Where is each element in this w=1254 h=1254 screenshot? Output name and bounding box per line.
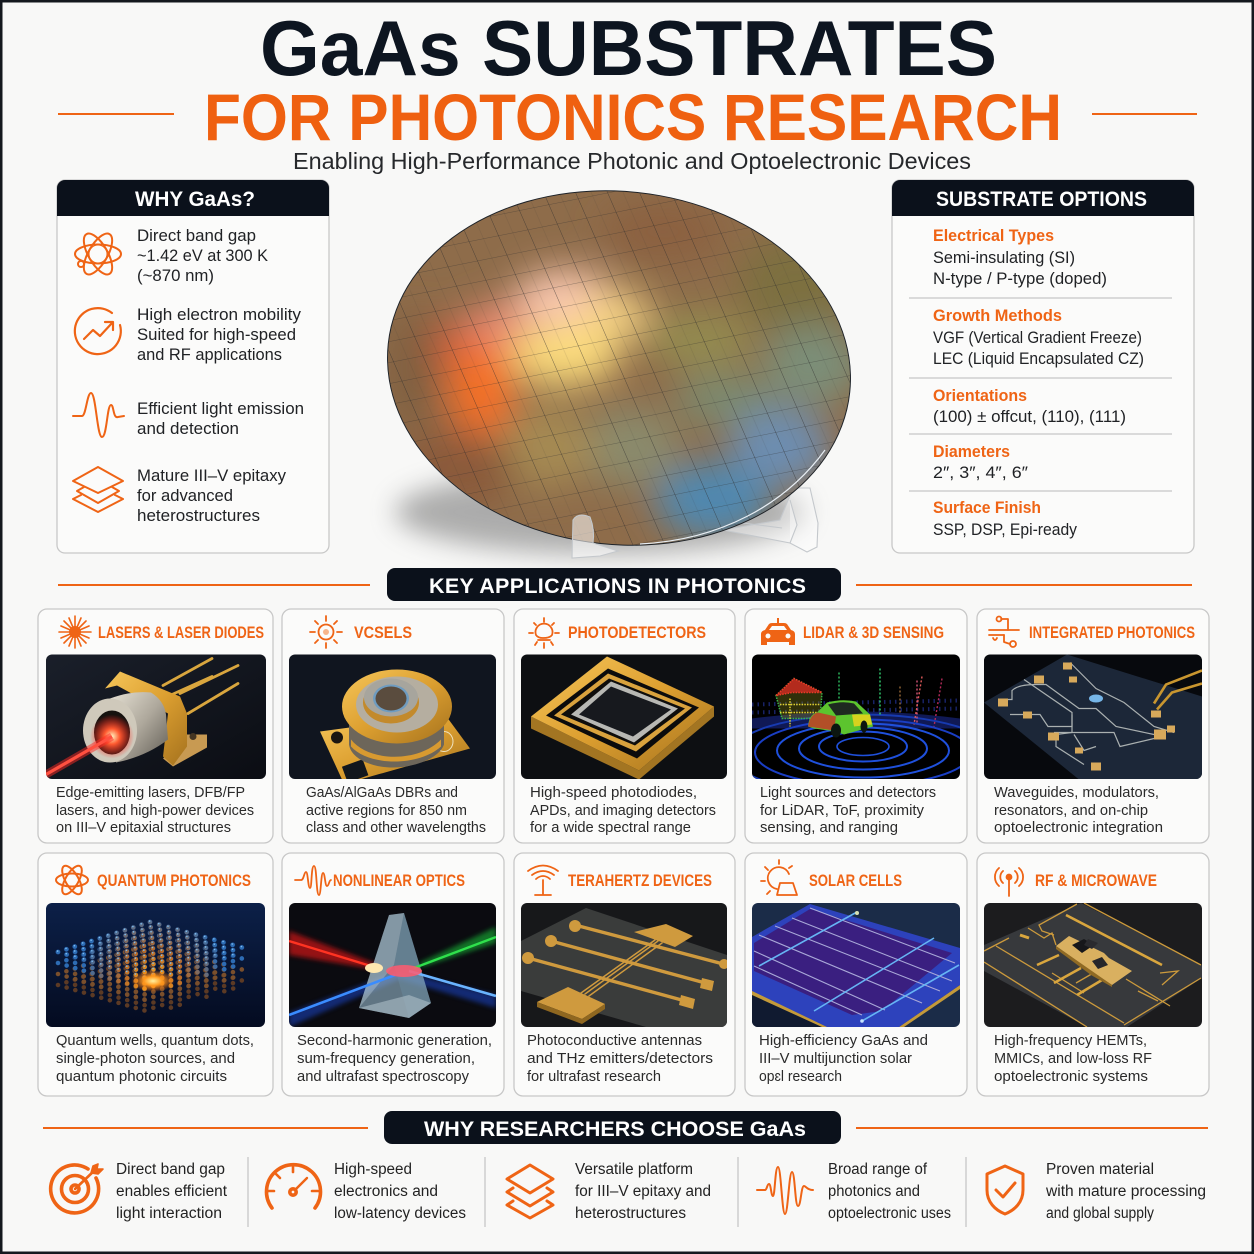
text: high electron mobility: and RF applications [137, 346, 282, 364]
icon: sun and solar panel [761, 860, 797, 895]
description: quantum photonics: quantum photonic circuits [56, 1068, 227, 1085]
icon: circuit [989, 616, 1019, 647]
card: quantum photonics [38, 853, 273, 1096]
description: VCSELs: active regions for 850 nm [306, 802, 467, 819]
description: photodetectors: for a wide spectral range [530, 819, 691, 836]
description: integrated photonics: Waveguides, modulators, [994, 784, 1159, 801]
heading: key applications [58, 568, 1192, 601]
option: orientations: Orientations [933, 387, 1027, 405]
image: THz antenna [521, 903, 729, 1027]
option: growth methods: LEC (Liquid Encapsulated CZ) [933, 350, 1144, 368]
benefit text: high-speed electronics: low-latency devices [334, 1205, 466, 1222]
card: solar cells [745, 853, 967, 1096]
text: high electron mobility [137, 306, 302, 364]
icon: antenna [528, 866, 558, 895]
icon: shield check [987, 1166, 1023, 1214]
description: RF and microwave: High-frequency HEMTs, [994, 1032, 1147, 1049]
title: GaAs SUBSTRATES [260, 4, 997, 92]
benefit text: versatile platform: heterostructures [575, 1205, 686, 1222]
description: photodetectors: High-speed photodiodes, [530, 784, 697, 801]
text: direct band gap: (~870 nm) [137, 267, 214, 285]
benefit: proven material [987, 1161, 1206, 1222]
panel header: why GaAs: WHY GaAs? [135, 188, 255, 211]
option: surface finish: SSP, DSP, Epi-ready [933, 521, 1078, 539]
benefit: versatile platform [507, 1161, 711, 1222]
description: integrated photonics: optoelectronic integration [994, 819, 1163, 836]
description: solar cells: III–V multijunction solar [759, 1050, 912, 1067]
text: high electron mobility: Suited for high-speed [137, 326, 296, 344]
benefit text: proven material: and global supply [1046, 1205, 1154, 1222]
description: LiDAR: Light sources and detectors [760, 784, 936, 801]
description: RF and microwave: MMICs, and low-loss RF [994, 1050, 1152, 1067]
description: terahertz devices [527, 1032, 713, 1085]
icon: quantum atom [56, 863, 88, 897]
benefit text: versatile platform: for III–V epitaxy and [575, 1183, 711, 1200]
description: integrated photonics: resonators, and on-chip [994, 802, 1148, 819]
benefit text: proven material: Proven material [1046, 1161, 1154, 1178]
description: solar cells: High-efficiency GaAs and [759, 1032, 928, 1049]
description: solar cells [759, 1032, 928, 1085]
benefit text: broad range: photonics and [828, 1183, 920, 1200]
text: direct band gap: Direct band gap [137, 227, 256, 245]
benefit text: high-speed electronics: High-speed [334, 1161, 412, 1178]
option: electrical types [933, 227, 1107, 288]
image: LiDAR point cloud [752, 654, 960, 779]
image: VCSEL package [289, 654, 496, 783]
heading: LiDAR: LIDAR & 3D SENSING [803, 624, 944, 642]
description: LiDAR: sensing, and ranging [760, 819, 898, 836]
image: photodetector chip [521, 654, 727, 780]
description: lasers: lasers, and high-power devices [56, 802, 254, 819]
text: direct band gap [137, 227, 268, 285]
benefit text: direct band gap [116, 1161, 228, 1222]
description: terahertz devices: and THz emitters/detectors [527, 1050, 713, 1067]
benefit text: direct band gap: Direct band gap [116, 1161, 225, 1178]
text: epitaxy: heterostructures [137, 507, 260, 525]
benefit text: proven material: with mature processing [1045, 1183, 1206, 1200]
option: diameters: Diameters [933, 443, 1010, 461]
text: light emission [137, 400, 304, 438]
description: photodetectors [530, 784, 716, 836]
panel: substrate options [892, 180, 1194, 553]
image: prism and laser beams [289, 903, 496, 1027]
card: VCSELs [282, 609, 504, 843]
description: RF and microwave [994, 1032, 1152, 1085]
benefit: direct band gap [51, 1161, 228, 1222]
image: photonic chip [984, 654, 1202, 780]
heading: terahertz devices: TERAHERTZ DEVICES [568, 872, 712, 890]
benefit: broad range [757, 1161, 951, 1222]
option: surface finish [933, 499, 1078, 539]
benefit text: broad range [828, 1161, 951, 1222]
description: integrated photonics [994, 784, 1163, 836]
option: orientations: (100) ± offcut, (110), (111) [933, 408, 1126, 426]
panel header: substrate options: SUBSTRATE OPTIONS [936, 188, 1147, 211]
heading: solar cells: SOLAR CELLS [809, 872, 902, 890]
card: nonlinear optics [282, 853, 504, 1096]
icon: RF signal [995, 868, 1023, 896]
icon: stacked layers [507, 1165, 553, 1218]
text: epitaxy [137, 467, 287, 525]
image: solar cell [752, 903, 960, 1027]
text: high electron mobility: High electron mobility [137, 306, 302, 324]
panel header: substrate options [892, 180, 1194, 216]
heading: integrated photonics: INTEGRATED PHOTONICS [1029, 624, 1195, 642]
benefit text: versatile platform [575, 1161, 711, 1222]
image: laser diode [46, 654, 266, 780]
description: LiDAR: for LiDAR, ToF, proximity [760, 802, 924, 819]
card: lasers [38, 609, 273, 843]
description: VCSELs: GaAs/AlGaAs DBRs and [306, 784, 458, 801]
description: VCSELs [306, 784, 486, 836]
description: lasers [56, 784, 254, 836]
description: VCSELs: class and other wavelengths [306, 819, 486, 836]
icon: sun detector [529, 618, 559, 648]
text: direct band gap: ~1.42 eV at 300 K [137, 247, 268, 265]
icon: gauge [266, 1165, 320, 1208]
benefit text: high-speed electronics: electronics and [334, 1183, 438, 1200]
wafer disc [369, 168, 869, 568]
wafer on stand [385, 190, 851, 568]
description: nonlinear optics: and ultrafast spectroscopy [297, 1068, 469, 1085]
card: terahertz devices [514, 853, 735, 1096]
heading: lasers: LASERS & LASER DIODES [98, 624, 264, 642]
description: RF and microwave: optoelectronic systems [994, 1068, 1148, 1085]
heading: VCSELs: VCSELS [354, 624, 412, 642]
icon: laser burst [59, 616, 91, 648]
heading: why researchers choose GaAs: WHY RESEARCHERS CHOOSE GaAs [424, 1117, 806, 1141]
option: orientations [933, 387, 1126, 426]
icon: layers [73, 467, 123, 512]
description: nonlinear optics [297, 1032, 492, 1085]
description: nonlinear optics: sum-frequency generation, [297, 1050, 475, 1067]
description: LiDAR [760, 784, 936, 836]
rear stand [723, 488, 818, 552]
icon: atom [75, 229, 121, 279]
description: solar cells: opɛl research [759, 1068, 842, 1085]
description: quantum photonics: Quantum wells, quantum dots, [56, 1032, 254, 1049]
benefit text: versatile platform: Versatile platform [575, 1161, 693, 1178]
heading: quantum photonics: QUANTUM PHOTONICS [97, 872, 251, 890]
option: growth methods [933, 307, 1144, 368]
heading: key applications: KEY APPLICATIONS IN PHOTONICS [429, 574, 806, 598]
heading: RF and microwave: RF & MICROWAVE [1035, 872, 1157, 890]
bright wafer edge [640, 450, 825, 544]
card: integrated photonics [977, 609, 1209, 843]
heading: photodetectors: PHOTODETECTORS [568, 624, 706, 642]
text: light emission: Efficient light emission [137, 400, 304, 418]
icon: VCSEL emitter [310, 616, 342, 648]
option: electrical types: N-type / P-type (doped) [933, 270, 1107, 288]
description: terahertz devices: Photoconductive antennas [527, 1032, 702, 1049]
title: FOR PHOTONICS RESEARCH [204, 80, 1062, 154]
icon: wave packet [295, 866, 331, 895]
option: diameters: 2″, 3″, 4″, 6″ [933, 464, 1028, 482]
text: light emission: and detection [137, 420, 239, 438]
icon: target [51, 1164, 103, 1213]
description: quantum photonics: single-photon sources, and [56, 1050, 235, 1067]
benefit text: direct band gap: light interaction [116, 1205, 222, 1222]
description: quantum photonics [56, 1032, 254, 1085]
front stand foot [572, 515, 618, 558]
image: quantum dot lattice [46, 903, 265, 1027]
wafer shadow [395, 470, 805, 554]
benefit text: direct band gap: enables efficient [116, 1183, 228, 1200]
card: RF and microwave [977, 853, 1209, 1096]
description: nonlinear optics: Second-harmonic generation, [297, 1032, 492, 1049]
icon: rising trend in circle [75, 308, 121, 354]
icon: car with sensor [761, 618, 795, 645]
text: epitaxy: Mature III–V epitaxy [137, 467, 287, 485]
icon: waveform [757, 1167, 813, 1214]
benefit: high-speed electronics [266, 1161, 466, 1222]
text: epitaxy: for advanced [137, 487, 233, 505]
panel header: why GaAs [57, 180, 329, 216]
option: growth methods: VGF (Vertical Gradient Freeze) [933, 329, 1142, 347]
icon: light waveform [73, 393, 124, 437]
image: RF circuit [984, 903, 1202, 1027]
option: growth methods: Growth Methods [933, 307, 1062, 325]
option: electrical types: Semi-insulating (SI) [933, 249, 1075, 267]
benefit text: high-speed electronics [334, 1161, 466, 1222]
card: photodetectors [514, 609, 735, 843]
heading: why researchers choose GaAs [43, 1111, 1208, 1144]
description: lasers: on III–V epitaxial structures [56, 819, 231, 836]
heading: nonlinear optics: NONLINEAR OPTICS [333, 872, 465, 890]
benefit text: broad range: optoelectronic uses [828, 1205, 951, 1222]
option: diameters [933, 443, 1028, 482]
benefit text: broad range: Broad range of [828, 1161, 928, 1178]
description: terahertz devices: for ultrafast research [527, 1068, 661, 1085]
subtitle: Enabling High-Performance Photonic and Optoelectronic Devices [293, 148, 971, 174]
benefit text: proven material [1045, 1161, 1206, 1222]
description: photodetectors: APDs, and imaging detectors [530, 802, 716, 819]
title [58, 4, 1197, 154]
card: LiDAR [744, 608, 968, 844]
option: electrical types: Electrical Types [933, 227, 1054, 245]
panel: why GaAs [57, 180, 329, 553]
option: surface finish: Surface Finish [933, 499, 1041, 517]
description: lasers: Edge-emitting lasers, DFB/FP [56, 784, 245, 801]
